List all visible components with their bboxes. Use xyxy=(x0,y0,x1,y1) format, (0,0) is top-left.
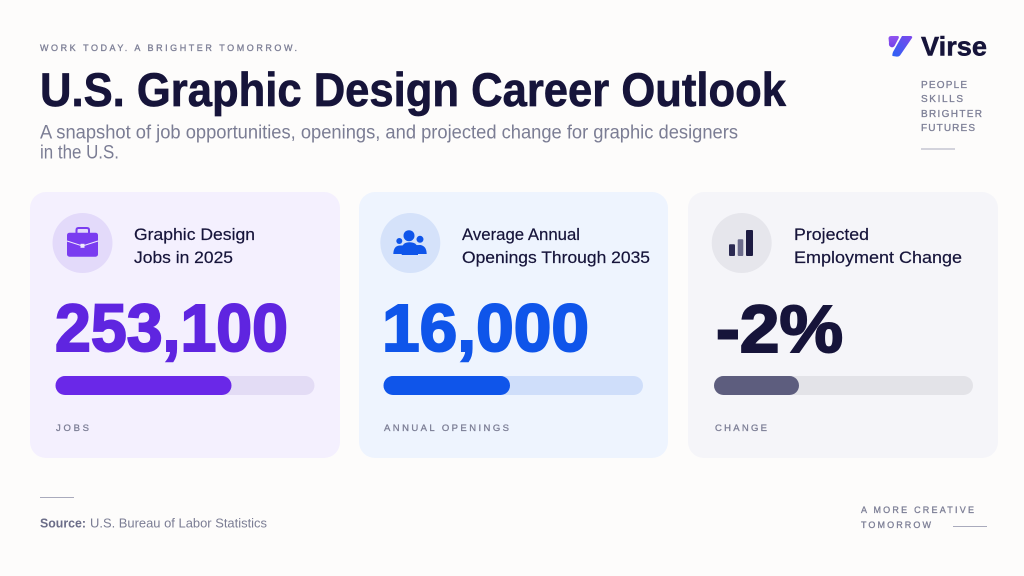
value: 16,000 xyxy=(382,291,589,366)
eyebrow tagline: WORK TODAY. A BRIGHTER TOMORROW. xyxy=(40,43,297,53)
card background xyxy=(30,192,340,458)
logo: Virse xyxy=(888,32,987,62)
card background xyxy=(688,192,998,458)
panel: graphic design jobs xyxy=(30,192,340,458)
bar label: JOBS xyxy=(56,423,89,434)
footer tagline: TOMORROW xyxy=(861,520,932,530)
title: U.S. Graphic Design Career Outlook xyxy=(40,64,787,117)
value: -2% xyxy=(716,292,843,367)
panel: projected employment change xyxy=(688,192,998,458)
card heading xyxy=(462,225,650,267)
card heading: Employment Change xyxy=(794,248,962,267)
footer tagline xyxy=(861,505,974,530)
card heading: Openings Through 2035 xyxy=(462,248,650,267)
card heading: Projected xyxy=(794,225,869,244)
brand tagline list: PEOPLE xyxy=(921,80,967,91)
card heading xyxy=(794,225,962,267)
brand tagline list: BRIGHTER xyxy=(921,109,982,120)
card background xyxy=(359,192,668,458)
bar label: ANNUAL OPENINGS xyxy=(384,423,509,434)
icon: bar chart xyxy=(712,213,772,273)
progress bar xyxy=(384,376,643,395)
icon: people xyxy=(380,213,440,273)
source: Source: xyxy=(40,516,86,530)
icon: logo mark xyxy=(888,36,912,57)
icon: briefcase xyxy=(52,213,112,273)
bar label: CHANGE xyxy=(715,423,767,434)
source: U.S. Bureau of Labor Statistics xyxy=(90,516,267,530)
progress bar xyxy=(714,376,973,395)
subtitle: in the U.S. xyxy=(40,142,119,164)
wordmark: Virse xyxy=(921,32,987,62)
brand tagline list: SKILLS xyxy=(921,94,963,105)
panel: average annual openings xyxy=(359,192,668,458)
footer tagline: A MORE CREATIVE xyxy=(861,505,974,515)
card heading: Graphic Design xyxy=(134,225,255,244)
progress bar xyxy=(56,376,314,395)
card heading: Jobs in 2025 xyxy=(134,248,233,267)
brand tagline list xyxy=(921,80,982,134)
card heading xyxy=(134,225,255,267)
subtitle xyxy=(40,122,738,164)
brand tagline list: FUTURES xyxy=(921,123,975,134)
card heading: Average Annual xyxy=(462,225,580,244)
value: 253,100 xyxy=(55,291,288,366)
subtitle: A snapshot of job opportunities, openings, and projected change for graphic designers xyxy=(40,122,738,144)
